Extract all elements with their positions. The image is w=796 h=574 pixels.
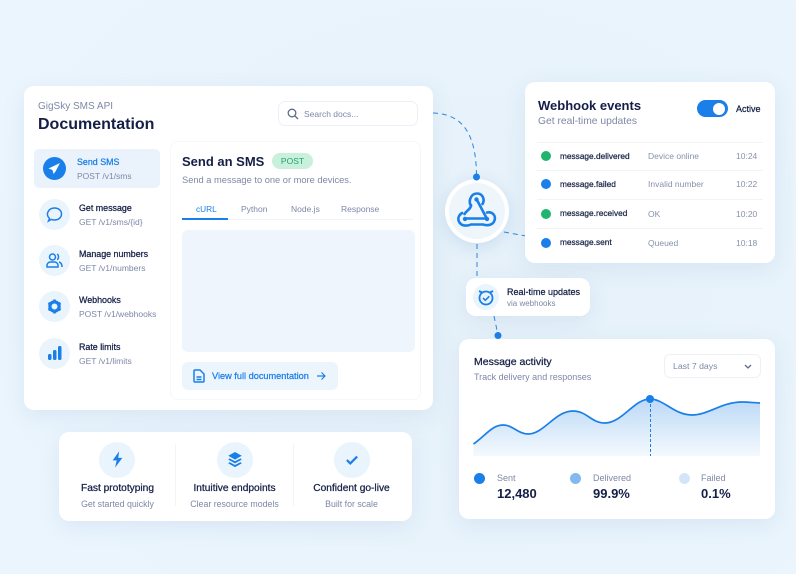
feature: confident go-live <box>313 442 390 509</box>
toggle <box>697 100 728 117</box>
search box: Search docs... <box>304 109 358 119</box>
nav item: send sms: Send SMS <box>77 157 119 167</box>
description: Send a message to one or more devices. <box>182 175 352 185</box>
panel: webhook events <box>525 82 775 263</box>
stat: delivered: Delivered <box>593 473 631 483</box>
event row: received: OK <box>648 209 660 219</box>
nav item: manage numbers <box>39 245 148 276</box>
divider: second <box>293 444 294 506</box>
feature: intuitive endpoints: Clear resource models <box>190 499 279 509</box>
post badge: POST <box>281 156 304 166</box>
callout text <box>507 287 580 308</box>
event row: sent: message.sent <box>560 237 612 247</box>
stat: sent: Sent <box>497 473 516 483</box>
event row: failed <box>537 170 763 199</box>
event row: sent: Queued <box>648 238 678 248</box>
nav item: rate limits: GET /v1/limits <box>79 356 132 366</box>
subtitle: Track delivery and responses <box>474 372 591 382</box>
panel: message activity <box>459 339 775 519</box>
panel: documentation <box>24 86 433 410</box>
event row: received: 10:20 <box>736 209 757 219</box>
heading: Message activity <box>474 356 552 368</box>
callout text: via webhooks <box>507 299 555 308</box>
subtitle: Get real-time updates <box>538 116 637 127</box>
heading: Webhook events <box>538 98 641 113</box>
event row: sent: 10:18 <box>736 238 757 248</box>
nav item: send sms <box>34 149 160 188</box>
title: Send an SMS <box>182 154 264 169</box>
date dropdown: Last 7 days <box>673 361 717 371</box>
icon: shield check <box>473 284 499 310</box>
stat: sent: 12,480 <box>497 486 537 501</box>
post badge <box>272 153 313 169</box>
active label: Active <box>736 104 761 114</box>
event row: failed: Invalid number <box>648 179 704 189</box>
nav item: webhooks: Webhooks <box>79 295 121 305</box>
feature: fast prototyping: Fast prototyping <box>81 483 154 494</box>
feature: confident go-live: Confident go-live <box>313 483 390 494</box>
nav item: get message: GET /v1/sms/{id} <box>79 217 143 227</box>
stat: failed: Failed <box>701 473 726 483</box>
documentation button <box>182 362 338 390</box>
tabs <box>182 196 413 220</box>
nav item: get message: Get message <box>79 203 132 213</box>
event row: received: message.received <box>560 208 627 218</box>
api label: GigSky SMS API <box>38 101 113 112</box>
code block <box>182 230 415 352</box>
nav item: manage numbers: Manage numbers <box>79 249 148 259</box>
nav item: manage numbers: GET /v1/numbers <box>79 263 145 273</box>
event row: failed: 10:22 <box>736 179 757 189</box>
panel: features <box>59 432 412 521</box>
search box <box>278 101 418 126</box>
tabs: Response <box>341 204 379 214</box>
stat: sent <box>474 473 537 501</box>
documentation button: View full documentation <box>212 371 309 381</box>
nav item: get message <box>39 199 143 230</box>
panel: send an sms <box>170 141 421 400</box>
event row: sent <box>537 228 763 257</box>
stat: failed <box>679 473 731 501</box>
stat: delivered <box>570 473 631 501</box>
nav item: webhooks <box>39 291 156 322</box>
nav item: rate limits <box>39 338 132 369</box>
nav item: webhooks: POST /v1/webhooks <box>79 309 156 319</box>
divider: first <box>175 444 176 506</box>
icon: webhook hub <box>445 179 509 243</box>
tabs: Python <box>241 204 267 214</box>
event row: received <box>537 199 763 228</box>
tabs: Node.js <box>291 204 320 214</box>
event row: delivered <box>537 142 763 171</box>
event row: delivered: 10:24 <box>736 151 757 161</box>
stat: delivered: 99.9% <box>593 486 630 501</box>
nav item: send sms: POST /v1/sms <box>77 171 132 181</box>
callout: real-time updates <box>466 278 590 316</box>
feature: confident go-live: Built for scale <box>325 499 378 509</box>
tabs: cURL <box>196 204 217 214</box>
event row: delivered: Device online <box>648 151 699 161</box>
stat: failed: 0.1% <box>701 486 731 501</box>
feature: intuitive endpoints: Intuitive endpoints <box>193 483 276 494</box>
feature: intuitive endpoints <box>190 442 279 509</box>
nav item: rate limits: Rate limits <box>79 342 120 352</box>
date dropdown <box>664 354 761 378</box>
feature: fast prototyping: Get started quickly <box>81 499 154 509</box>
callout text: Real-time updates <box>507 287 580 297</box>
event row: failed: message.failed <box>560 179 616 189</box>
heading: Documentation <box>38 116 154 133</box>
feature: fast prototyping <box>81 442 154 509</box>
event row: delivered: message.delivered <box>560 151 630 161</box>
